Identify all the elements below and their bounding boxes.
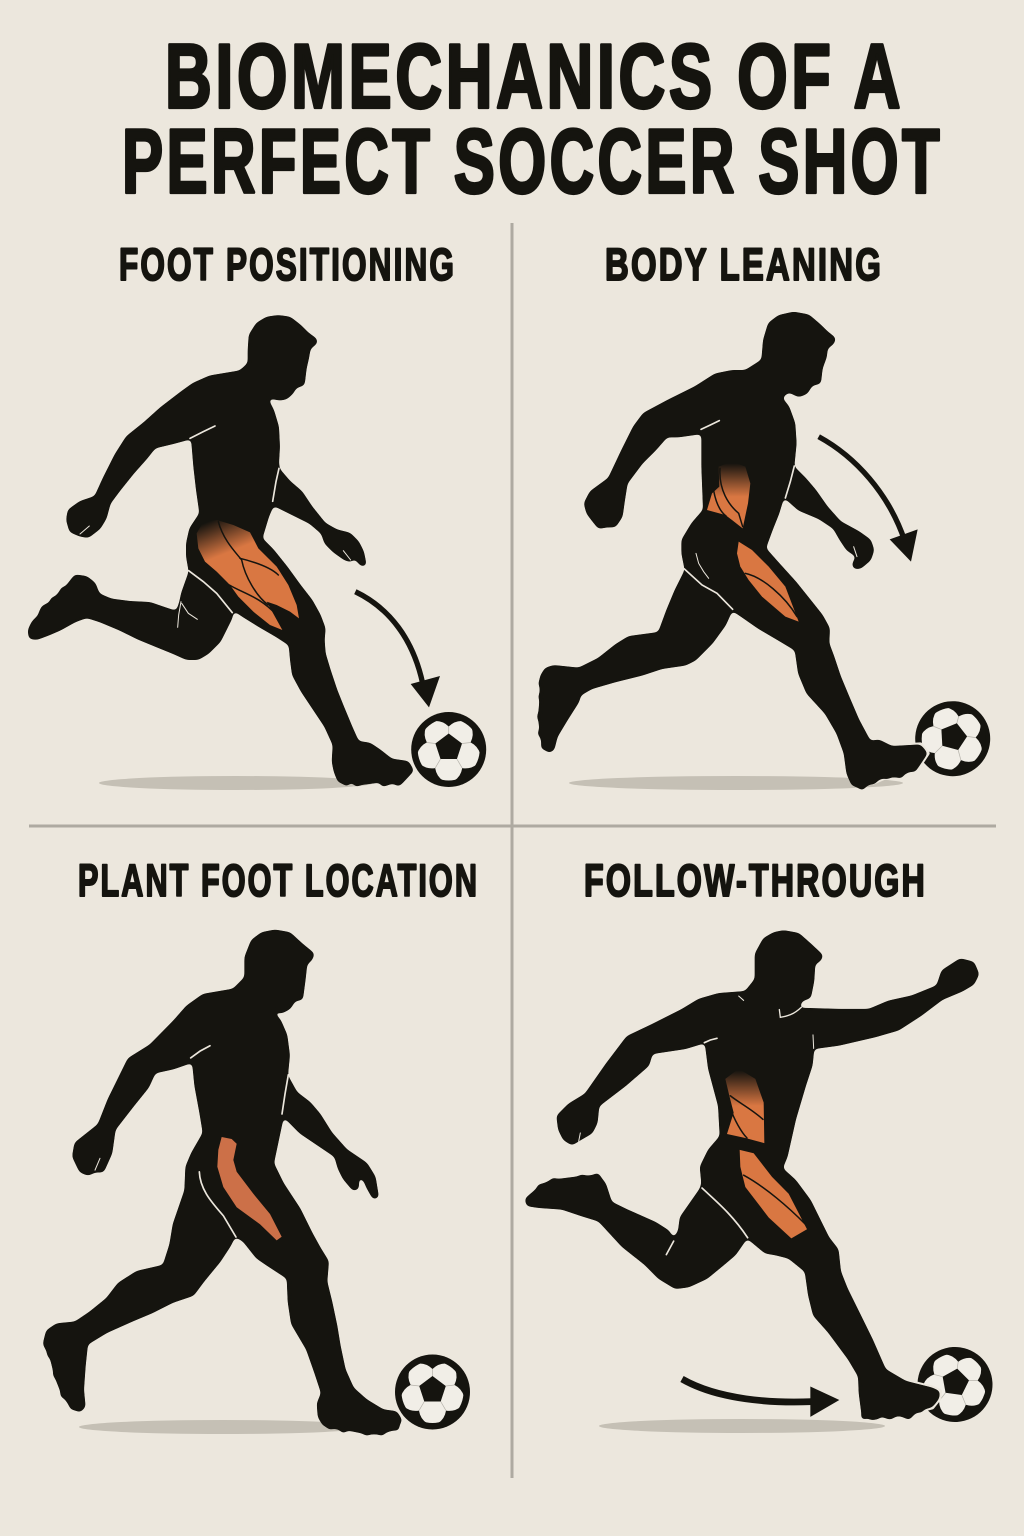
panel: follow-through <box>525 855 997 1433</box>
player silhouette with core and thigh muscles <box>525 931 979 1420</box>
panel: body leaning <box>537 239 999 790</box>
ground shadow <box>599 1419 885 1433</box>
ground shadow <box>79 1420 367 1434</box>
title <box>122 26 943 212</box>
player silhouette with thigh muscle <box>28 316 413 787</box>
arrow: curving down to ball <box>355 592 440 707</box>
soccer ball <box>411 712 486 787</box>
soccer ball <box>913 1342 997 1427</box>
heading: plant foot location: PLANT FOOT LOCATION <box>78 855 479 906</box>
arrow: horizontal follow-through sweep <box>682 1379 839 1417</box>
panel: foot positioning <box>28 239 486 790</box>
arrow: curving lean direction <box>819 437 918 562</box>
heading: body leaning: BODY LEANING <box>605 239 883 290</box>
ground shadow <box>99 776 373 790</box>
ground shadow <box>569 776 903 790</box>
heading: foot positioning: FOOT POSITIONING <box>119 239 456 290</box>
player silhouette with core and thigh muscles <box>537 312 927 790</box>
soccer ball <box>395 1354 470 1430</box>
panel: plant foot location <box>43 855 479 1436</box>
player silhouette with hip flexor muscle <box>43 930 402 1436</box>
soccer ball <box>907 693 999 785</box>
